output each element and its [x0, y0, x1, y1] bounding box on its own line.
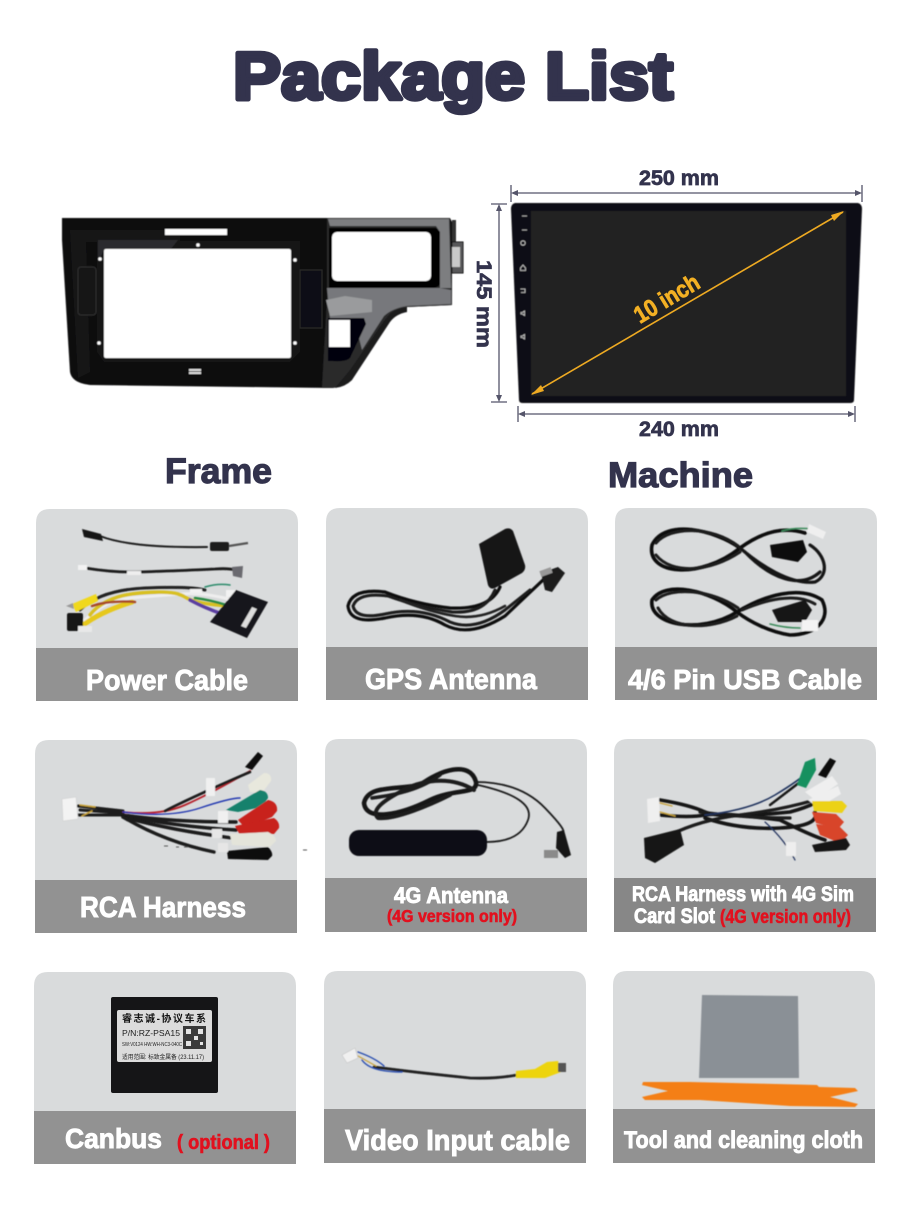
dimension: 240 mm width: 240 mm — [639, 418, 719, 441]
dimension: 145 mm height: 145 mm — [472, 260, 495, 348]
caption — [387, 883, 517, 926]
caption: Card Slot — [634, 905, 715, 928]
dimension: 240 mm width — [518, 406, 855, 441]
dimension: 250 mm width: 250 mm — [639, 167, 719, 190]
dimension: 145 mm height — [472, 204, 507, 402]
panel: RCA Harness with 4G Sim Card Slot — [614, 739, 876, 932]
photo: video input cable — [342, 1048, 566, 1078]
caption: (4G version only) — [387, 906, 517, 926]
caption — [632, 883, 854, 928]
panel: GPS Antenna — [326, 508, 588, 700]
photo: canbus box with label: 睿志诚-协议车系 — [122, 1012, 206, 1025]
label: Frame: Frame — [165, 452, 272, 491]
photo: canbus box with label: SW:V0124 HW:WH-NC3-040C — [122, 1042, 182, 1048]
dimension: 10 inch diagonal: 10 inch — [629, 269, 705, 329]
photo: 4G antenna — [349, 769, 571, 858]
caption: ( optional ) — [177, 1132, 270, 1154]
dimension: 10 inch diagonal — [531, 211, 844, 395]
caption: Video Input cable — [345, 1125, 570, 1157]
panel: 4G Antenna — [325, 739, 587, 932]
caption: (4G version only) — [720, 907, 851, 928]
photo: canbus box with label: P/N:RZ-PSA15 — [122, 1029, 181, 1038]
photo: canbus box with label: 适用范围: 标致金属备 (23.11.17) — [122, 1053, 204, 1061]
panel: Tool and cleaning cloth — [613, 971, 875, 1163]
caption: Canbus — [65, 1123, 162, 1154]
panel: Video Input cable — [324, 971, 586, 1163]
caption: 4/6 Pin USB Cable — [628, 664, 862, 695]
photo: pry tool — [642, 1082, 858, 1107]
caption: RCA Harness with 4G Sim — [632, 883, 854, 906]
panel: Canbus — [34, 972, 296, 1164]
photo: RCA harness — [62, 752, 307, 860]
caption: Power Cable — [86, 665, 248, 697]
photo: USB cables — [652, 524, 826, 635]
label: Machine: Machine — [608, 456, 753, 495]
machine screen photo — [511, 203, 862, 403]
photo: cleaning cloth — [699, 995, 799, 1078]
frame product photo — [62, 218, 463, 388]
photo: canbus box with label — [111, 997, 218, 1093]
panel: 4/6 Pin USB Cable — [615, 508, 877, 700]
panel: Power Cable — [36, 509, 298, 701]
caption: RCA Harness — [80, 892, 246, 924]
photo: power cable set — [66, 529, 268, 638]
caption — [65, 1123, 270, 1154]
photo: RCA harness with SIM slot — [644, 758, 850, 863]
caption: Tool and cleaning cloth — [624, 1127, 863, 1154]
caption: GPS Antenna — [365, 664, 538, 696]
panel: RCA Harness — [35, 740, 307, 933]
dimension: 250 mm width — [511, 167, 862, 202]
title: Package List — [233, 39, 673, 114]
photo: GPS antenna — [348, 528, 565, 630]
side button icons — [520, 216, 527, 339]
caption: 4G Antenna — [394, 883, 509, 908]
